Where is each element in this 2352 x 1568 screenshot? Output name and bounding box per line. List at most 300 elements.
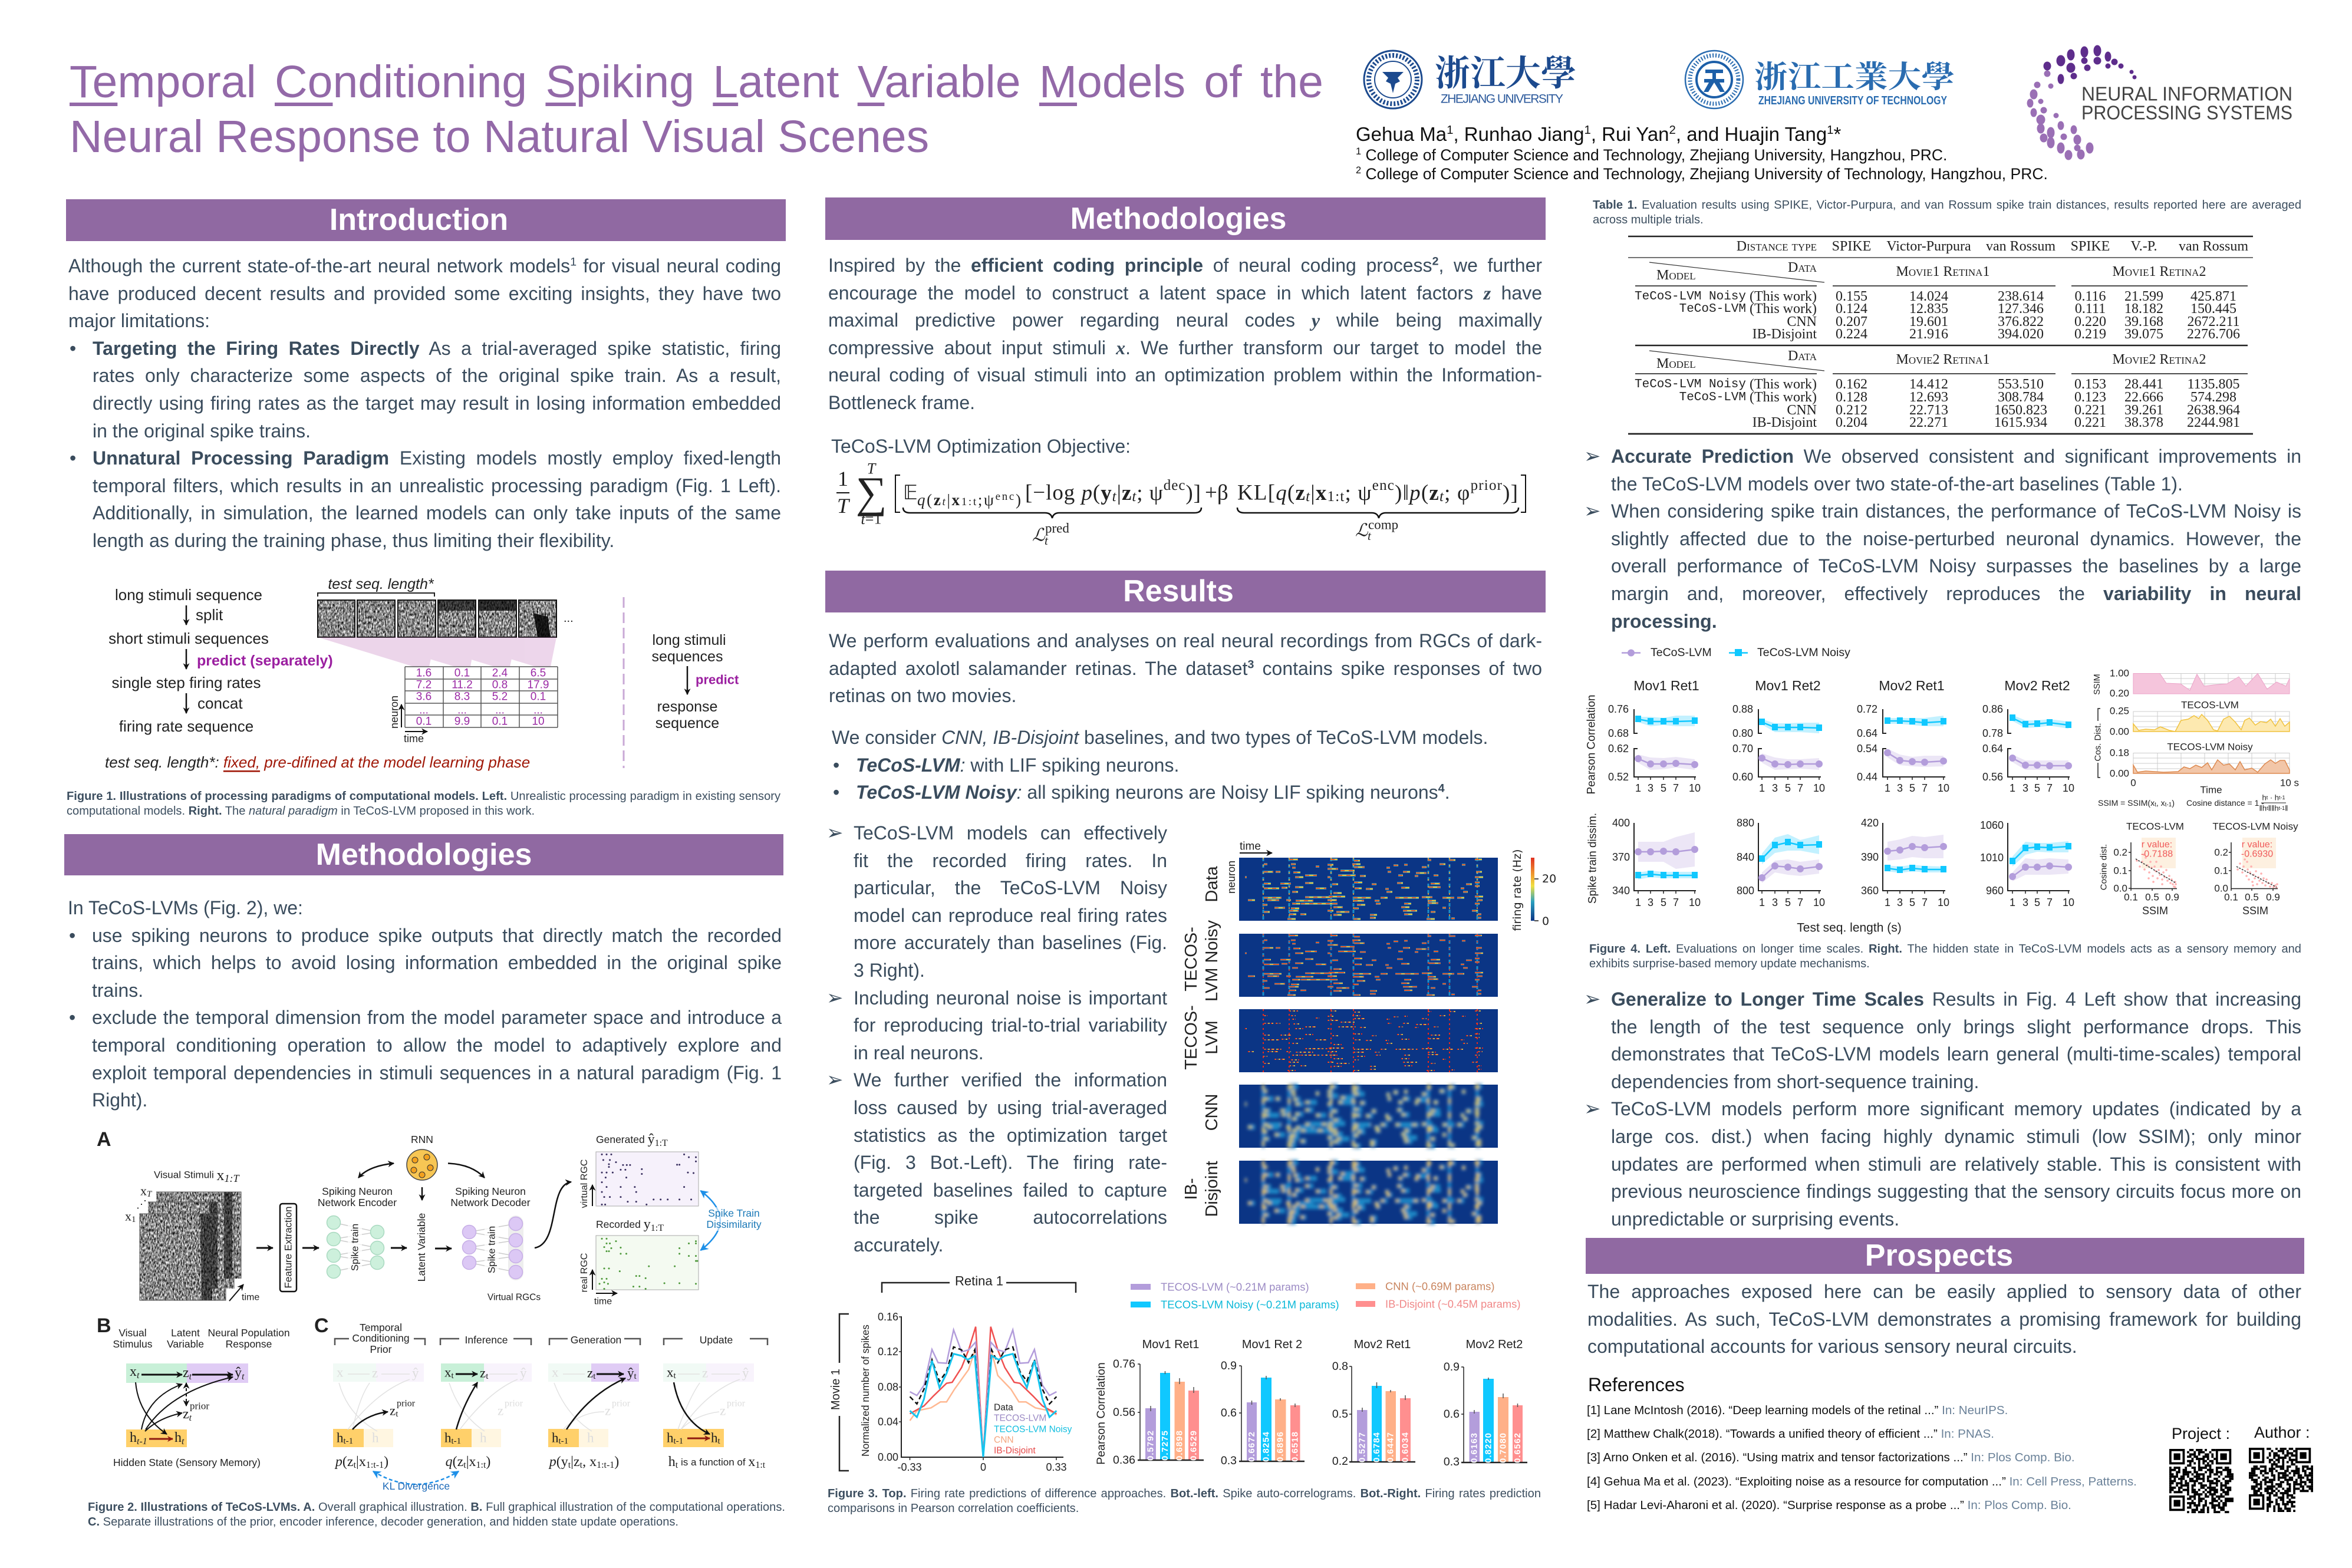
C: generation: x [552,1365,559,1379]
panel C [314,1315,767,1492]
formula: optimization objective: )‖ [1395,481,1409,505]
text: generalization and memory updates: large cos. dist.) when facing highly dynamic stimuli (low SSIM); only minor [1611,1126,2301,1147]
tick labels: 3 [1648,897,1653,908]
text: introduction: in the original spike trains. [93,420,311,442]
scatter TeCoS-LVM: r value: [2142,839,2172,850]
panel B: Visual [118,1327,147,1339]
firing rate table [388,667,558,745]
chart: Mov2 Ret1: Mov2 Ret1 [1354,1338,1411,1351]
formula labels: ) [384,1454,388,1470]
formula: optimization objective: ) [1016,491,1021,509]
C: inference: prior [505,1398,523,1409]
metric formulas: SSIM = SSIM(x [2098,798,2155,808]
text: introduction: Unnatural Processing Paradigm Existing models mostly employ fixed-length [93,447,781,469]
formula labels: t [568,1460,571,1470]
text: results intro: retinas on two movies. [829,685,1016,706]
panel C: C [314,1315,329,1337]
tick labels: 0.88 [1732,703,1753,715]
chart: Mov1 Ret2 [1221,1338,1305,1467]
table 1: evaluation results: Movie2 Retina1 [1896,352,1989,367]
text: introduction: Targeting the Firing Rates Directly As a trial-averaged spike statistic, firing [93,338,781,359]
tick labels: 7 [1797,897,1803,908]
text: results findings: for reproducing trial-to-trial variability [854,1014,1167,1036]
cosine distance TeCoS-LVM [2110,699,2290,737]
panel B: ŷ [235,1365,242,1381]
left paradigm flow: single step firing rates [112,674,261,691]
tick labels: 3 [1648,782,1653,794]
tick labels: 5 [1785,897,1791,908]
tick labels: 360 [1861,885,1879,897]
panel A [97,1128,762,1306]
formula: optimization objective: )] [1185,481,1201,505]
rasters: Recorded y [596,1217,651,1232]
C: update: z [702,1365,708,1381]
cosine distance Noisy: 0.00 [2110,767,2129,779]
tick labels: 7 [1797,782,1803,794]
QR code: project [2169,1424,2234,1514]
tick labels: 0.64 [1982,743,2003,755]
panel B: t [182,1436,185,1447]
heatmap: IB-Disjoint [1239,1157,1498,1227]
formula labels: x [748,1454,755,1470]
figure 4 left: longer time scales: Mov1 Ret2 [1755,678,1821,693]
text: introduction [68,255,781,551]
metric formulas: t-1 [2165,802,2172,808]
heading: Methodologies center: Methodologies [1070,202,1286,236]
table 1: evaluation results: TeCoS-LVM Noisy (This work) [1635,377,1817,392]
title: Neural Response to Natural Visual Scenes [70,111,929,162]
panel C: Inference [465,1334,508,1346]
table 1: evaluation results: IB-Disjoint [1753,415,1817,430]
left paradigm flow: short stimuli sequences [108,630,269,647]
table 1: evaluation results: 0.212 [1836,403,1867,418]
text: results findings: (Fig. 3 Bot.-Left). The firing rate- [854,1152,1167,1173]
encoder [318,1185,397,1278]
table 1: evaluation results: Distance type [1737,239,1817,254]
cosine distance Noisy: TECOS-LVM Noisy [2167,742,2253,752]
table 1: evaluation results: 2672.211 [2187,314,2240,330]
C: update: z [720,1403,726,1418]
references list: [3] Arno Onken et al. (2016). “Using matrix and tensor factorizations ...” In: Plos Comp. Bio. [1587,1451,2075,1464]
tick labels: 840 [1737,851,1754,863]
formula labels: p(y [549,1454,568,1470]
table 1: evaluation results: 0.123 [2074,390,2106,405]
table 1: evaluation results: Data [1788,348,1817,364]
formula: optimization objective: ; ψ [1137,481,1163,505]
tick labels: 0.80 [1732,727,1753,739]
tick labels: 10 [1938,897,1949,908]
chart: Mov2 Ret2: 0.6 [1444,1408,1460,1421]
C: inference: x [444,1365,452,1379]
references list: [2] Matthew Chalk(2018). “Towards a unified theory of efficient ...” In: PNAS. [1587,1427,1994,1441]
panel B: h [174,1430,182,1445]
C: inference: ŷ [520,1365,527,1381]
rasters: 1:T [651,1223,664,1233]
text: accurate prediction: slightly affected due to the noise-perturbed neuronal dynamics. However, the [1611,528,2301,549]
text: introduction: Additionally, in simulation, the learned models can only take inputs of the same [93,502,781,523]
logo: Zhejiang University: 浙江大學 [1435,45,1576,96]
formula labels: |z [571,1454,580,1470]
formula: optimization objective: [−log p(y [1025,481,1112,505]
caption: table 1 [1593,198,2301,228]
table 1: evaluation results: van Rossum [1986,239,2055,254]
spike train dissimilarity [700,1191,762,1250]
C: generation: z [605,1403,611,1418]
table 1: evaluation results: 0.124 [1836,301,1867,317]
figure 3 bottom-left: auto-correlograms: Retina 1 [955,1273,1003,1289]
heatmap labels: IB- [1182,1178,1201,1200]
text: accurate prediction: processing. [1611,611,1717,632]
metric formulas: t [2155,802,2156,808]
heading: Introduction: Introduction [330,203,508,237]
text: results findings: in real neurons. [854,1042,984,1063]
tick labels: 1 [1635,897,1641,908]
table 1: evaluation results: 28.441 [2124,377,2163,392]
firing rate table: 1.6 [416,667,431,679]
firing rate table: 10 [532,716,545,727]
heatmap labels [1182,841,1272,1217]
panel C: Generation [571,1334,621,1346]
text: accurate prediction: Accurate Prediction We observed consistent and significant improvements in [1611,446,2301,467]
figure 1: processing paradigms [105,576,739,772]
C: inference: z [480,1365,486,1381]
formula: optimization objective: ∑ [856,469,887,517]
formula labels: |x [356,1454,366,1470]
stimulus frames: test seq. length* [328,576,434,592]
tick labels: 0.72 [1857,703,1877,715]
metric formulas: ht · ht-1 [2262,793,2285,802]
markers base [1635,749,2072,881]
text: results intro: We perform evaluations and analyses on real neural recordings from RGCs of dark- [829,630,1542,651]
panel B: t [137,1370,140,1381]
table 1: evaluation results: CNN [1787,314,1817,330]
tick labels: 3 [2022,897,2028,908]
firing rate table: 7.2 [416,679,431,691]
heading: Results [825,571,1546,612]
text: methodologies left: trains, which helps to avoid losing information embedded in the original spike [92,952,782,973]
formula: optimization objective: dec [1164,477,1185,493]
text: results intro [829,630,1542,706]
formula: optimization objective: | [1117,481,1121,505]
right paradigm flow: sequence [655,715,719,732]
tick labels: 0.76 [1608,703,1629,715]
table 1: evaluation results: 12.693 [1909,390,1948,405]
formula: optimization objective: p(z [1409,481,1439,505]
figure 3 bottom-left: auto-correlograms: 0.08 [878,1381,898,1393]
C: generation: z [587,1365,593,1381]
C: prior: ŷ [412,1365,419,1381]
tick labels: 0.44 [1857,771,1877,783]
text: prospects: modalities. As such, TeCoS-LVM demonstrates a promising framework for building [1587,1309,2301,1330]
tick labels: 0.56 [1982,771,2003,783]
C: inference: t [486,1372,489,1381]
formula: optimization objective: T [867,460,877,477]
text: accurate prediction: the TeCoS-LVM models over two state-of-the-art baselines (Table 1). [1611,473,2183,495]
figure 3 bottom-left: auto-correlograms [829,1273,1076,1473]
C: generation: t [593,1372,596,1381]
firing rate table: 0.1 [454,667,470,679]
C: update: h [711,1430,718,1445]
figure 4 left: longer time scales: Pearson Correlation [1586,695,1597,794]
formula labels: 1:t [476,1460,486,1470]
caption: figure 3 [828,1487,1541,1515]
tick labels: 10 [1813,897,1825,908]
RNN [407,1134,437,1180]
note: test seq. length*: fixed, pre-difined at the model learning phase [105,753,530,771]
tick labels: 3 [1772,782,1778,794]
logo: NeurIPS [2027,45,2292,160]
firing rate table: 11.2 [452,679,473,691]
figure 3 bottom-left: auto-correlograms: 0.04 [878,1416,898,1428]
table 1: evaluation results: 425.871 [2190,289,2236,304]
decoder: Spiking Neuron [455,1185,526,1197]
tick labels: 370 [1612,851,1630,863]
formula labels: t [463,1460,466,1470]
formula: optimization objective: 1:t [1327,488,1344,505]
cosine distance TeCoS-LVM: 0.00 [2110,726,2129,737]
right paradigm flow: predict [696,672,739,687]
dashed divider [622,597,625,768]
C: inference: t [452,1371,454,1381]
table 1: evaluation results: 1650.823 [1994,403,2047,418]
table 1: evaluation results: 0.155 [1836,289,1867,304]
table 1: evaluation results: 1615.934 [1994,415,2047,430]
table 1: evaluation results: van Rossum [2179,239,2248,254]
tick labels: 960 [1986,885,2004,897]
formula labels: is a function of [678,1456,748,1468]
visual stimuli stack: Visual Stimuli x [154,1166,224,1184]
SSIM trace: SSIM [2093,674,2102,695]
logo: Zhejiang University of Technology: 浙江工業大學 [1754,52,1955,97]
SSIM trace: 0.20 [2110,687,2129,699]
tick labels: 0.78 [1982,727,2003,739]
caption: table 1: Table 1. Evaluation results using SPIKE, Victor-Purpura, and van Rossum spike train distances, results reported here are averaged [1593,199,2301,212]
QR code: project: Project : [2172,1425,2230,1442]
C: prior: t-1 [343,1437,353,1446]
SSIM trace: 1.00 [2110,667,2129,679]
tick labels: 420 [1861,817,1879,829]
firing rate table: 3.6 [416,691,431,703]
tick labels: 7 [1922,897,1928,908]
scatter TeCoS-LVM: 0.0 [2113,883,2127,894]
rasters: time [594,1297,612,1306]
colorbar [1511,849,1556,931]
correlogram legend: TECOS-LVM Noisy [994,1424,1072,1435]
C: generation: h [587,1430,594,1445]
decoder: Network Decoder [450,1197,531,1208]
formula: optimization objective: x [1316,481,1327,505]
table 1: evaluation results: Model [1656,268,1696,283]
text: generalization and memory updates: unpredictable or surprising events. [1611,1208,1899,1230]
C: generation: prior [612,1398,631,1409]
heatmap: TeCoS-LVM Noisy [1239,934,1498,997]
figure 3 bottom-right: Pearson bar charts [1095,1338,1527,1468]
authors and affiliations: 2 College of Computer Science and Technology, Zhejiang University of Technology, Hangzhou, PRC. [1356,165,2048,183]
text: model types: TeCoS-LVM Noisy: all spiking neurons are Noisy LIF spiking neurons4. [856,782,1450,803]
scatter TeCoS-LVM: 0.2 [2113,846,2127,858]
encoder: Spiking Neuron [322,1185,393,1197]
scatter TeCoS-LVM: 0.1 [2124,891,2138,903]
chart: Mov1 Ret1: 0.6898 [1174,1430,1185,1461]
firing rate table: 0.1 [531,691,546,703]
tick labels: 0.64 [1857,727,1877,739]
chart: Mov2 Ret2: 0.7080 [1498,1432,1508,1463]
title [70,57,1323,162]
text: generalization and memory updates [1585,986,2301,1233]
rasters [579,1132,699,1306]
table 1: evaluation results: 39.168 [2124,314,2163,330]
caption: figure 2: C. Separate illustrations of the prior, encoder inference, decoder generation, and hidden state update operations. [88,1516,678,1529]
firing rate table: time [404,733,424,745]
cosine distance Noisy: 0.18 [2110,747,2129,758]
chart: Mov1 Ret2: 0.6518 [1290,1431,1300,1462]
tick labels: 1 [1635,782,1641,794]
heading: Results: Results [1123,574,1234,608]
text: methodologies left: exclude the temporal dimension from the model parameter space and introduce a [92,1007,782,1028]
tick labels: 0.68 [1608,727,1629,739]
formula: optimization objective: z [1122,481,1131,505]
C: prior: t [396,1409,398,1419]
formula labels: 1:t-1 [597,1460,614,1470]
chart: Mov2 Ret1: 0.8 [1332,1360,1348,1373]
panel B: Variable [167,1338,204,1350]
firing rate table: neuron [388,696,400,729]
formula: optimization objective: 1 [838,467,848,490]
heading: Prospects [1586,1238,2304,1274]
text: results intro: adapted axolotl salamander retinas. The dataset3 contains spike responses of two [829,658,1542,679]
tick labels: 5 [1661,897,1666,908]
text: introduction: rates only characterize some aspects of the original spike train. As a result, [93,365,781,386]
table 1: evaluation results: 0.221 [2074,403,2106,418]
SSIM trace [2093,667,2290,699]
heatmap labels: TECOS- [1182,927,1201,991]
panel B: B [97,1315,111,1337]
formula: optimization objective: t=1 [861,510,881,527]
table 1: evaluation results: 21.599 [2124,289,2163,304]
colorbar: 0 [1542,915,1549,928]
figure 3 legend: IB-Disjoint (~0.45M params) [1385,1298,1520,1310]
chart: Mov1 Ret1: 0.56 [1113,1406,1135,1419]
formula: optimization objective [836,460,1526,548]
figure 3 legend: CNN (~0.69M params) [1385,1280,1495,1292]
right paradigm flow: response [657,699,717,715]
text: results findings: particular, the TeCoS-LVM Noisy [854,877,1167,898]
table 1: evaluation results: CNN [1787,403,1817,418]
C: update: h [667,1430,673,1445]
tick labels: 10 [2063,897,2074,908]
caption: table 1: across multiple trials. [1593,213,1704,226]
tick labels: 10 [1689,897,1701,908]
text: methodologies center: Inspired by the efficient coding principle of neural coding process2, we further [828,255,1542,276]
text: introduction: length as during the training phase, thus limiting their flexibility. [93,530,614,551]
firing rate table: 9.9 [454,716,470,727]
table 1: evaluation results: SPIKE [2071,239,2110,254]
table 1: evaluation results: 1135.805 [2187,377,2240,392]
chart: Mov2 Ret1: 0.6447 [1385,1432,1396,1462]
chart: Mov1 Ret2: 0.3 [1221,1454,1237,1467]
heading: Prospects: Prospects [1865,1238,2013,1273]
table 1: evaluation results: 38.378 [2124,415,2163,430]
panel B: Neural Population [207,1327,290,1339]
chart: Mov2 Ret1: 0.6034 [1401,1432,1410,1462]
formula labels: t [354,1460,357,1470]
caption: figure 3: Figure 3. Top. Firing rate predictions of difference approaches. Bot.-left. Spike auto-correlograms. Bot.-Right. Firing rates prediction [828,1487,1541,1500]
text: generalization and memory updates: Generalize to Longer Time Scales Results in Fig. 4 Left show that increasing [1611,989,2301,1010]
cosine distance TeCoS-LVM: TECOS-LVM [2181,699,2239,711]
table 1: evaluation results: 0.224 [1836,327,1867,342]
formula: optimization objective: 1:t [961,495,977,508]
logo: Zhejiang University of Technology [1685,50,1955,110]
scatter TeCoS-LVM: 0.9 [2165,891,2179,903]
chart: Mov2 Ret2: 0.6163 [1469,1432,1480,1463]
tick labels: 1 [1759,897,1765,908]
C: update: x [667,1365,673,1379]
text: methodologies left: temporal conditioning operation to allow the model to adaptively explore and [92,1035,782,1056]
text: methodologies center: maximal predictive power regarding neural codes y while being maximally [828,309,1542,331]
C: update: t-1 [673,1437,683,1446]
tick labels: 0.62 [1608,743,1629,755]
C: prior: prior [397,1398,416,1409]
visual stimuli stack: time [242,1292,259,1303]
legend: TeCoS-LVM [1651,646,1712,659]
tick labels: 5 [2034,897,2040,908]
tick labels: 3 [1897,897,1903,908]
panel B: x [130,1364,137,1379]
lines noisy [1638,718,2068,875]
heatmap labels: Disjoint [1203,1161,1221,1217]
figure 3 bottom-left: auto-correlograms: Movie 1 [829,1369,842,1410]
table 1: evaluation results: TeCoS-LVM (This work) [1679,390,1817,405]
chart: Mov2 Ret1: 0.2 [1332,1455,1348,1468]
tick labels: 1 [2010,897,2015,908]
panel B: t [242,1371,245,1382]
formula: optimization objective: t [943,495,946,508]
correlogram legend [994,1403,1072,1456]
formula labels: p(z [335,1454,354,1470]
table 1: evaluation results: V.-P. [2131,239,2157,254]
tick labels: 400 [1612,817,1630,829]
formula: optimization objective: KL[q(z [1237,481,1305,505]
figure 4 left: longer time scales: Spike train dissim. [1587,813,1599,904]
figure 3 bottom-right: Pearson bar charts: Pearson Correlation [1095,1362,1108,1465]
text: accurate prediction: When considering spike train distances, the performance of TeCoS-LVM Noisy is [1611,500,2301,522]
correlogram curves [910,1327,1056,1457]
formula labels: q(z [446,1454,463,1470]
text: results findings: loss caused by using trial-averaged [854,1097,1167,1118]
visual stimuli stack: T [147,1190,153,1199]
C: prior: z [372,1365,378,1381]
panel B: h [130,1430,137,1445]
figure 3 bottom-left: auto-correlograms: 0.12 [878,1346,898,1358]
left paradigm flow: predict (separately) [197,653,333,669]
right paradigm flow: sequences [652,648,723,665]
chart: Mov1 Ret1: 0.36 [1113,1454,1135,1467]
formula labels: t [676,1460,678,1470]
tick labels: 0.60 [1732,771,1753,783]
C: update: ŷ [742,1365,749,1381]
text: methodologies left [68,897,782,1111]
caption: figure 3: comparisons in Pearson correlation coefficients. [828,1502,1079,1515]
formula labels: ) [614,1454,619,1470]
C: generation: t [634,1372,637,1381]
figure 3 bottom-left: auto-correlograms: 0.00 [878,1451,898,1463]
table 1: evaluation results: 39.261 [2124,403,2163,418]
formula labels: 1:t [755,1460,766,1470]
heatmap labels: CNN [1203,1094,1221,1131]
text: results findings: statistics as the optimization target [854,1125,1167,1146]
text: methodologies left: In TeCoS-LVMs (Fig. 2), we: [68,897,303,918]
firing rate table: 6.5 [531,667,546,679]
